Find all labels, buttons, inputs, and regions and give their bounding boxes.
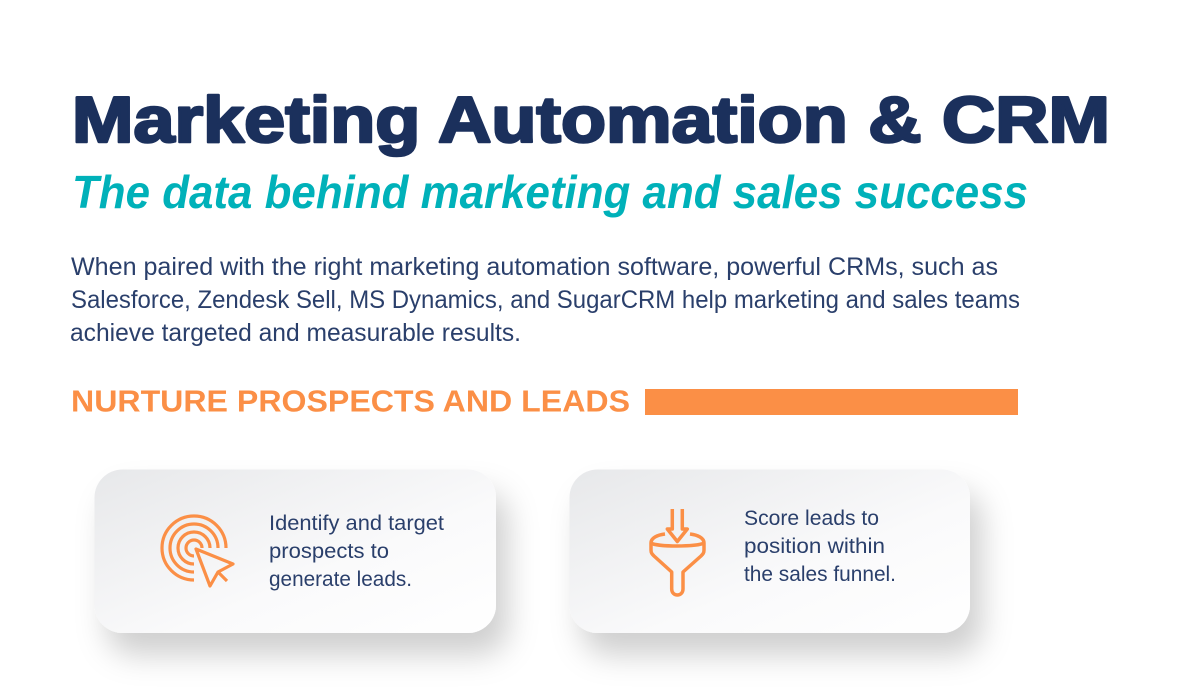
title: Marketing Automation & CRM	[72, 83, 1110, 156]
card text: the sales funnel.	[744, 562, 896, 586]
icon: funnel with arrow	[651, 509, 704, 595]
intro text block	[70, 253, 1020, 347]
card text: position within	[744, 534, 885, 558]
intro text block: achieve targeted and measurable results.	[70, 319, 521, 347]
subtitle: The data behind marketing and sales success	[72, 166, 1028, 218]
section heading: NURTURE PROSPECTS AND LEADS	[71, 384, 630, 418]
card text: generate leads.	[269, 567, 412, 591]
panel: score leads	[570, 470, 970, 633]
card text: Identify and target	[269, 511, 444, 535]
icon: target with cursor	[162, 516, 233, 586]
intro text block: Salesforce, Zendesk Sell, MS Dynamics, and SugarCRM help marketing and sales teams	[71, 286, 1020, 314]
card text: prospects to	[269, 539, 389, 563]
card text: Score leads to	[744, 506, 879, 530]
panel: identify prospects	[94, 470, 496, 633]
heading bar	[645, 389, 1018, 415]
card text	[269, 511, 444, 591]
intro text block: When paired with the right marketing automation software, powerful CRMs, such as	[71, 253, 998, 281]
card text	[744, 506, 896, 586]
